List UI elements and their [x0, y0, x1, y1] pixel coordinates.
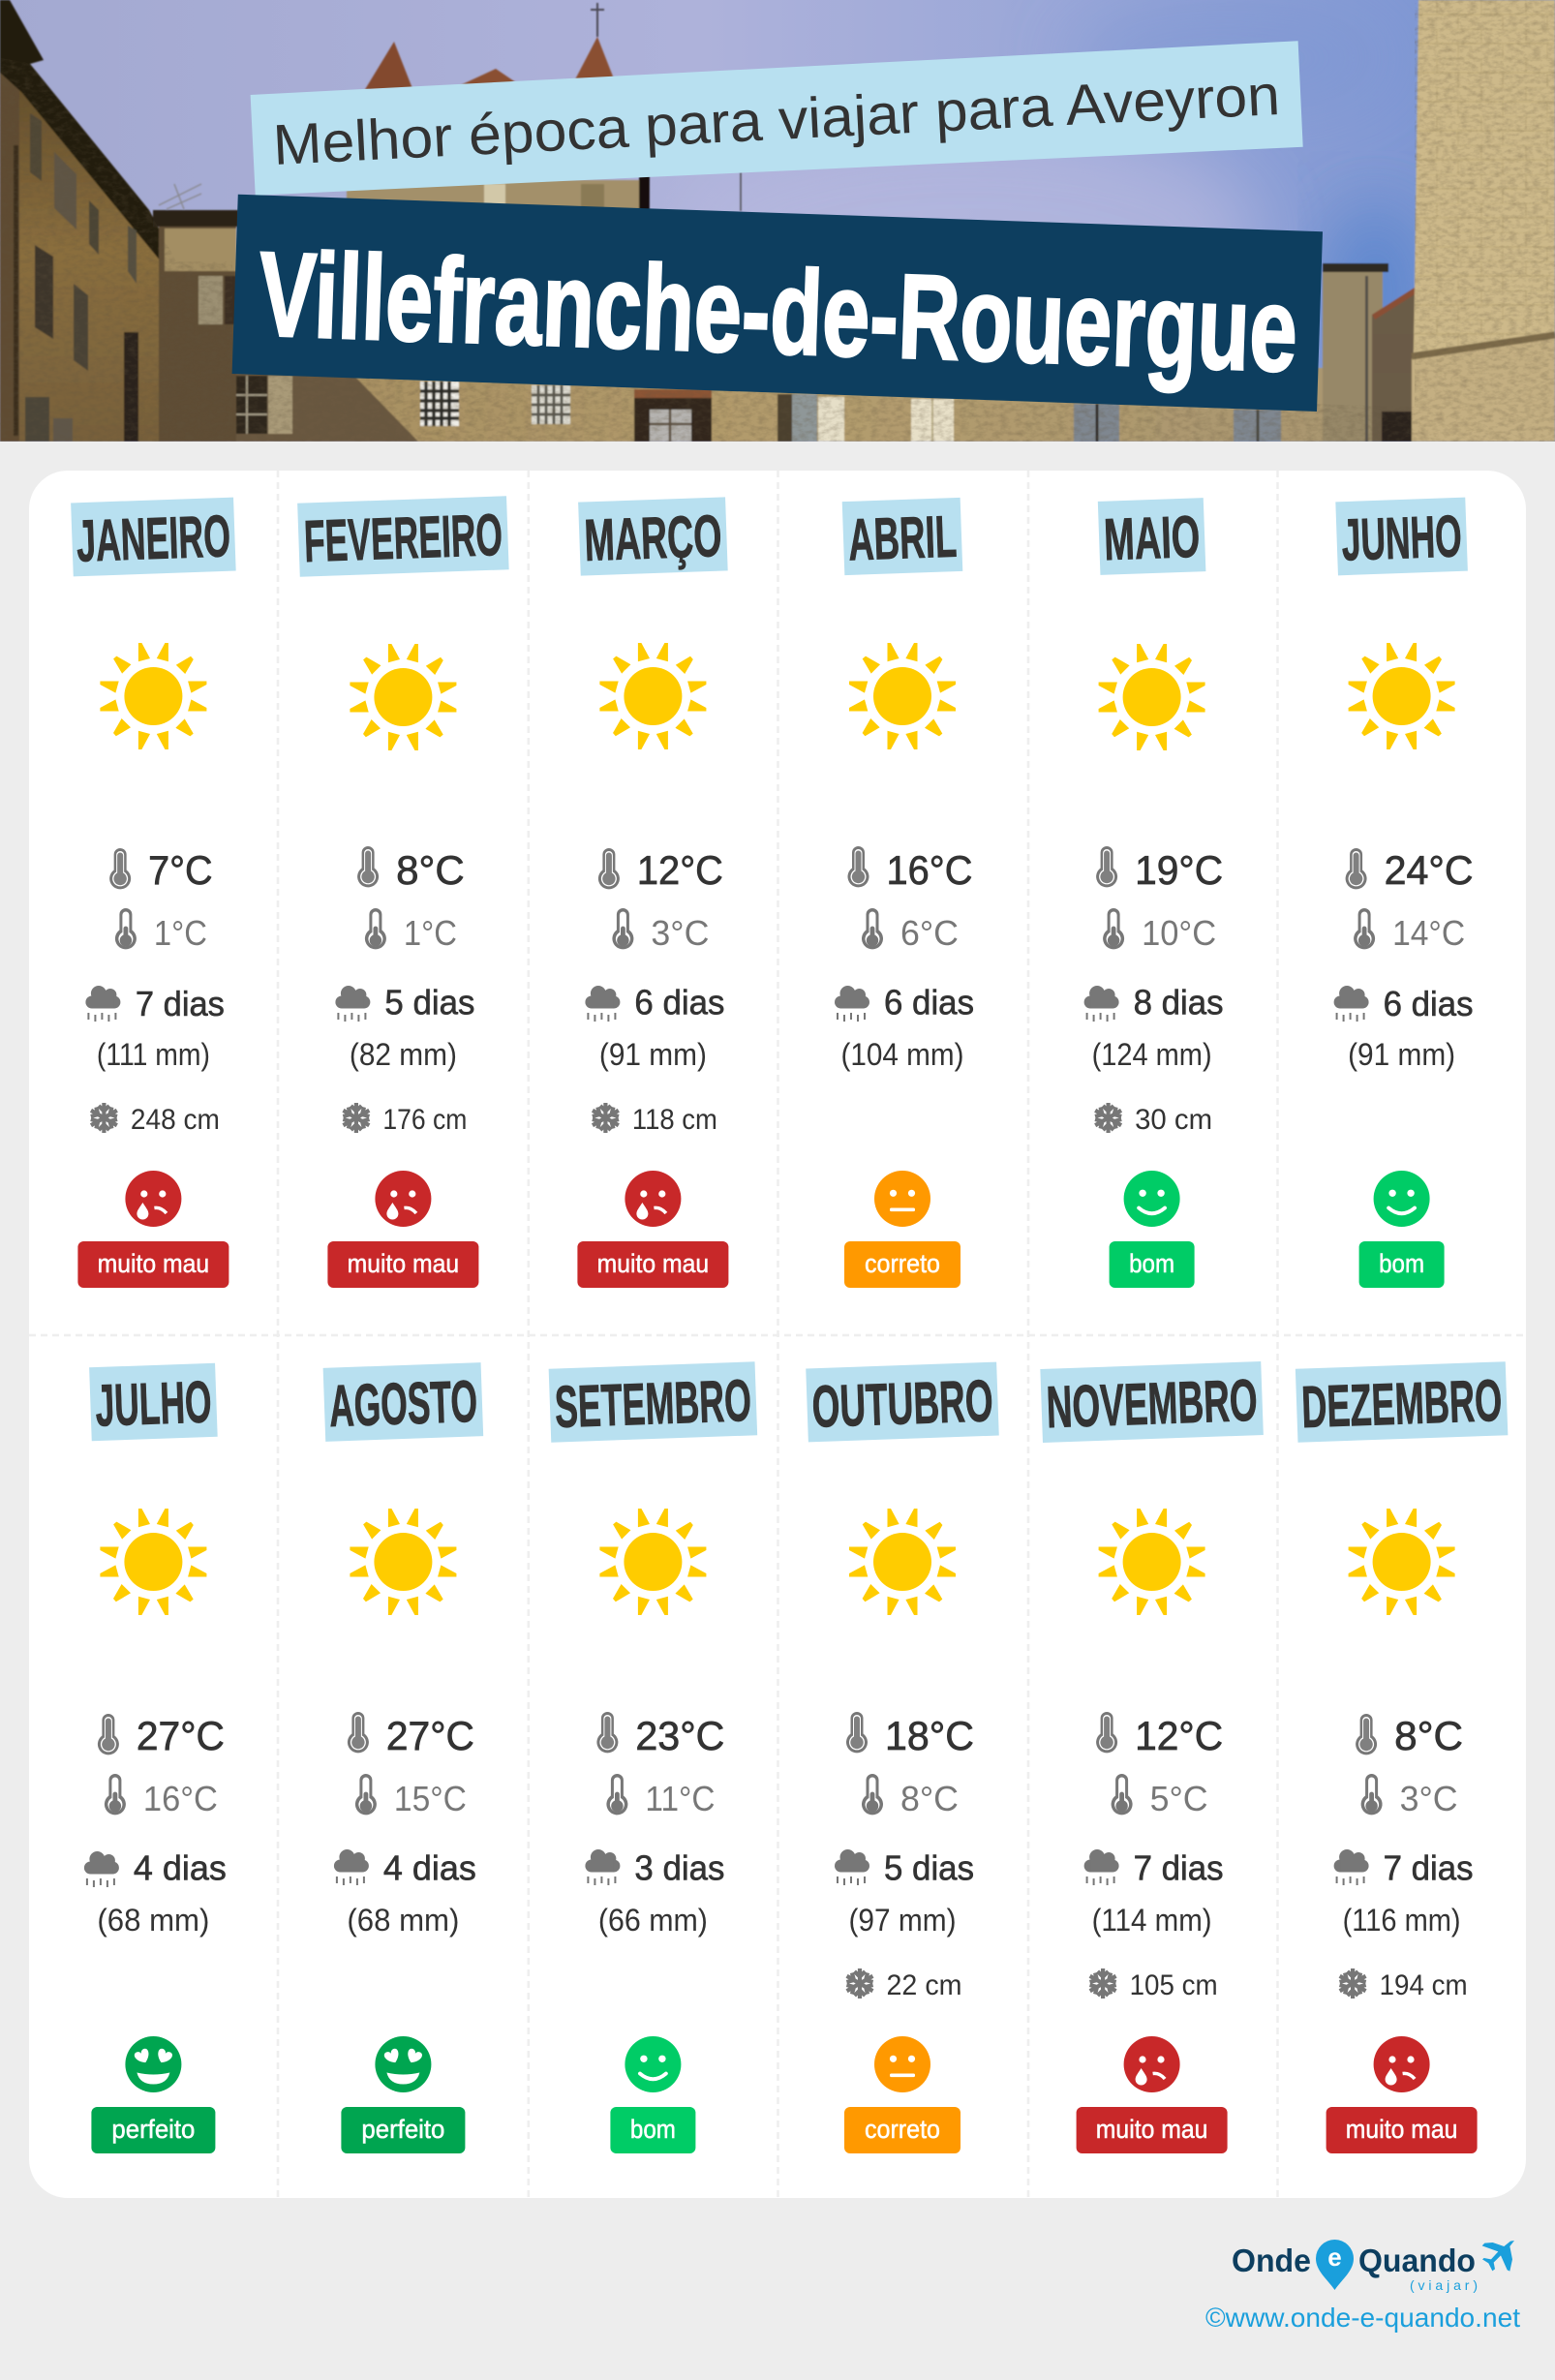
rating badge	[1359, 1241, 1445, 1288]
month heading	[323, 1362, 483, 1442]
icon: sun	[1099, 644, 1205, 750]
rain days	[1334, 984, 1474, 1023]
low temperature: 6°C	[900, 913, 959, 953]
rain days: 8 dias	[1134, 982, 1224, 1022]
high temperature: 18°C	[885, 1713, 974, 1758]
snowfall	[1337, 1968, 1468, 2001]
rating badge: muito mau	[98, 1249, 209, 1278]
rating badge: muito mau	[348, 1249, 459, 1278]
rainfall: (66 mm)	[598, 1903, 708, 1938]
month heading	[549, 1361, 757, 1443]
low temperature	[612, 908, 709, 953]
icon: sun	[350, 644, 456, 750]
month heading	[578, 497, 728, 576]
rain days	[585, 1847, 724, 1888]
snowfall	[1087, 1968, 1218, 2001]
rating badge	[341, 2107, 465, 2153]
low temperature: 3°C	[1400, 1779, 1458, 1818]
month heading: SETEMBRO	[554, 1367, 752, 1440]
rating badge: muito mau	[1346, 2115, 1457, 2144]
month: outubro	[806, 1362, 999, 2153]
high temperature: 7°C	[148, 847, 213, 893]
rainfall: (124 mm)	[1092, 1037, 1212, 1072]
rainfall: (104 mm)	[840, 1037, 964, 1072]
rain days: 7 dias	[136, 984, 225, 1023]
high temperature: 27°C	[386, 1713, 474, 1758]
icon: sun	[1349, 1509, 1455, 1615]
rain days	[835, 982, 974, 1022]
rating badge: correto	[865, 1249, 940, 1278]
logo: Onde e Quando: (viajar)	[1410, 2277, 1478, 2293]
low temperature: 16°C	[143, 1779, 218, 1818]
icon: map pin: e	[1327, 2243, 1342, 2272]
icon: rating face	[625, 2036, 681, 2092]
title ribbon	[232, 195, 1323, 412]
low temperature	[606, 1774, 715, 1818]
rainfall: (97 mm)	[848, 1903, 957, 1938]
high temperature: 19°C	[1135, 847, 1223, 893]
subtitle ribbon	[251, 41, 1303, 196]
month heading: JANEIRO	[76, 503, 231, 574]
month heading: MARÇO	[583, 503, 723, 573]
low temperature: 1°C	[404, 913, 457, 953]
high temperature: 8°C	[1394, 1713, 1463, 1758]
month heading	[71, 498, 236, 576]
hero photo: town buildings under a blue sky	[0, 0, 1555, 442]
icon: rating face	[874, 2036, 930, 2092]
low temperature: 1°C	[154, 913, 207, 953]
high temperature	[348, 1712, 474, 1758]
icon: sun	[1099, 1509, 1205, 1615]
rain days	[1084, 1847, 1224, 1888]
icon: rating face	[874, 1171, 930, 1227]
low temperature: 14°C	[1392, 913, 1465, 953]
snowfall	[1092, 1103, 1212, 1136]
low temperature	[105, 1774, 218, 1818]
icon: rating face	[375, 2036, 431, 2092]
low temperature	[1354, 908, 1465, 953]
rating badge	[844, 1241, 960, 1288]
snowfall	[341, 1103, 467, 1136]
month: maio	[1084, 498, 1224, 1288]
low temperature: 3°C	[651, 913, 709, 953]
high temperature: 12°C	[637, 847, 723, 893]
icon: rating face	[625, 1171, 681, 1227]
month: julho	[84, 1363, 227, 2153]
low temperature	[862, 1774, 959, 1818]
subtitle text: Melhor época para viajar para Aveyron	[271, 63, 1281, 177]
rain days	[1084, 982, 1224, 1022]
rating badge: perfeito	[111, 2115, 195, 2144]
rain days: 5 dias	[884, 1847, 974, 1888]
rating badge: bom	[1379, 1249, 1424, 1278]
snowfall: 22 cm	[887, 1969, 962, 2001]
month heading: NOVEMBRO	[1046, 1367, 1259, 1440]
high temperature: 27°C	[137, 1713, 225, 1758]
month heading: MAIO	[1103, 503, 1201, 572]
rain days: 7 dias	[1134, 1847, 1224, 1888]
icon: sun	[849, 1509, 956, 1615]
rain days	[1334, 1847, 1474, 1888]
rain days	[585, 982, 724, 1022]
icon: sun	[599, 1509, 706, 1615]
rain days	[84, 1847, 227, 1888]
icon: rating face	[375, 1171, 431, 1227]
month: agosto	[323, 1362, 483, 2153]
snowfall: 176 cm	[382, 1104, 467, 1136]
rain days: 4 dias	[134, 1847, 227, 1888]
icon: rating face	[1124, 2036, 1180, 2092]
icon: sun	[100, 643, 206, 749]
month: março	[577, 497, 728, 1288]
month heading	[1040, 1361, 1264, 1443]
rain days	[334, 1847, 476, 1888]
high temperature: 12°C	[1135, 1713, 1223, 1758]
month: janeiro	[71, 498, 236, 1288]
icon: sun	[350, 1509, 456, 1615]
rainfall: (91 mm)	[1348, 1037, 1455, 1072]
month heading: FEVEREIRO	[303, 502, 503, 574]
high temperature	[848, 846, 972, 893]
high temperature: 8°C	[396, 847, 465, 893]
month: abril	[835, 498, 974, 1288]
rain days: 3 dias	[634, 1847, 724, 1888]
rating badge	[1326, 2107, 1478, 2153]
snowfall: 194 cm	[1380, 1969, 1468, 2001]
rain days	[335, 982, 474, 1022]
month: novembro	[1040, 1361, 1264, 2153]
low temperature	[355, 1774, 467, 1818]
rainfall: (82 mm)	[350, 1037, 457, 1072]
rating badge: muito mau	[1096, 2115, 1207, 2144]
month heading	[1335, 498, 1468, 575]
high temperature	[598, 847, 723, 893]
rating badge	[77, 1241, 229, 1288]
high temperature	[1356, 1713, 1463, 1758]
rainfall: (68 mm)	[347, 1903, 459, 1938]
low temperature	[1361, 1774, 1458, 1818]
logo: Onde e Quando	[1232, 2240, 1514, 2293]
rating badge: bom	[1129, 1249, 1174, 1278]
snowfall: 30 cm	[1135, 1104, 1212, 1136]
low temperature: 11°C	[645, 1779, 715, 1818]
high temperature	[357, 846, 465, 893]
icon: sun	[599, 643, 706, 749]
rating badge: bom	[630, 2115, 676, 2144]
icon: rating face	[1124, 1171, 1180, 1227]
rainfall: (91 mm)	[599, 1037, 707, 1072]
high temperature: 24°C	[1385, 847, 1474, 893]
high temperature: 23°C	[635, 1713, 724, 1758]
high temperature	[846, 1712, 974, 1758]
rating badge: muito mau	[597, 1249, 709, 1278]
rain days	[835, 1847, 974, 1888]
rating badge	[610, 2107, 695, 2153]
low temperature: 5°C	[1150, 1779, 1208, 1818]
high temperature	[596, 1712, 724, 1758]
logo: Onde e Quando: Quando	[1358, 2243, 1476, 2278]
high temperature	[1096, 1712, 1223, 1758]
icon: rating face	[125, 1171, 181, 1227]
rain days	[85, 984, 225, 1023]
month heading	[89, 1363, 218, 1441]
month heading: AGOSTO	[328, 1368, 478, 1439]
month: junho	[1334, 498, 1474, 1288]
high temperature	[1346, 847, 1474, 893]
snowfall	[844, 1968, 962, 2001]
icon: sun	[100, 1509, 206, 1615]
snowfall: 105 cm	[1130, 1969, 1218, 2001]
low temperature	[1103, 908, 1216, 953]
icon: rating face	[125, 2036, 181, 2092]
month heading: ABRIL	[847, 503, 958, 572]
snowfall	[88, 1103, 220, 1136]
month heading	[297, 496, 509, 577]
website credit: ©www.onde-e-quando.net	[1205, 2303, 1520, 2333]
rainfall: (114 mm)	[1092, 1903, 1212, 1938]
rating badge	[577, 1241, 728, 1288]
rain days: 6 dias	[884, 982, 974, 1022]
icon: rating face	[1374, 1171, 1430, 1227]
icon: sun	[1349, 643, 1455, 749]
high temperature	[98, 1713, 225, 1758]
rating badge: perfeito	[361, 2115, 444, 2144]
high temperature: 16°C	[887, 847, 972, 893]
snowfall	[590, 1103, 717, 1136]
rating badge	[1077, 2107, 1228, 2153]
rainfall: (116 mm)	[1343, 1903, 1461, 1938]
rating badge: correto	[865, 2115, 940, 2144]
month: setembro	[549, 1361, 757, 2153]
snowfall: 118 cm	[632, 1104, 717, 1136]
low temperature	[115, 908, 207, 953]
panel: climate calendar card	[29, 471, 1526, 2198]
snowfall: 248 cm	[131, 1104, 220, 1136]
high temperature	[109, 847, 213, 893]
low temperature: 15°C	[394, 1779, 467, 1818]
month: fevereiro	[297, 496, 509, 1288]
low temperature	[365, 908, 457, 953]
rating badge	[1110, 1241, 1195, 1288]
low temperature: 8°C	[900, 1779, 959, 1818]
rain days: 5 dias	[384, 982, 474, 1022]
month heading	[1098, 498, 1205, 575]
rainfall: (68 mm)	[97, 1903, 209, 1938]
low temperature	[862, 908, 959, 953]
month: dezembro	[1296, 1361, 1508, 2153]
icon: sun	[849, 643, 956, 749]
month heading	[806, 1362, 999, 1442]
low temperature	[1112, 1774, 1208, 1818]
month heading: OUTUBRO	[810, 1367, 994, 1440]
month heading: JULHO	[94, 1368, 213, 1439]
low temperature: 10°C	[1142, 913, 1216, 953]
rain days: 6 dias	[1384, 984, 1474, 1023]
icon: map pin	[1316, 2240, 1354, 2290]
rain days: 7 dias	[1384, 1847, 1474, 1888]
rating badge	[844, 2107, 960, 2153]
high temperature	[1096, 846, 1223, 893]
month heading	[842, 498, 962, 575]
icon: airplane	[1482, 2241, 1514, 2272]
rain days: 6 dias	[634, 982, 724, 1022]
logo: Onde e Quando: Onde	[1232, 2243, 1311, 2278]
month heading: JUNHO	[1341, 503, 1463, 573]
icon: rating face	[1374, 2036, 1430, 2092]
rain days: 4 dias	[383, 1847, 476, 1888]
rating badge	[91, 2107, 215, 2153]
rainfall: (111 mm)	[97, 1037, 210, 1072]
rating badge	[327, 1241, 478, 1288]
